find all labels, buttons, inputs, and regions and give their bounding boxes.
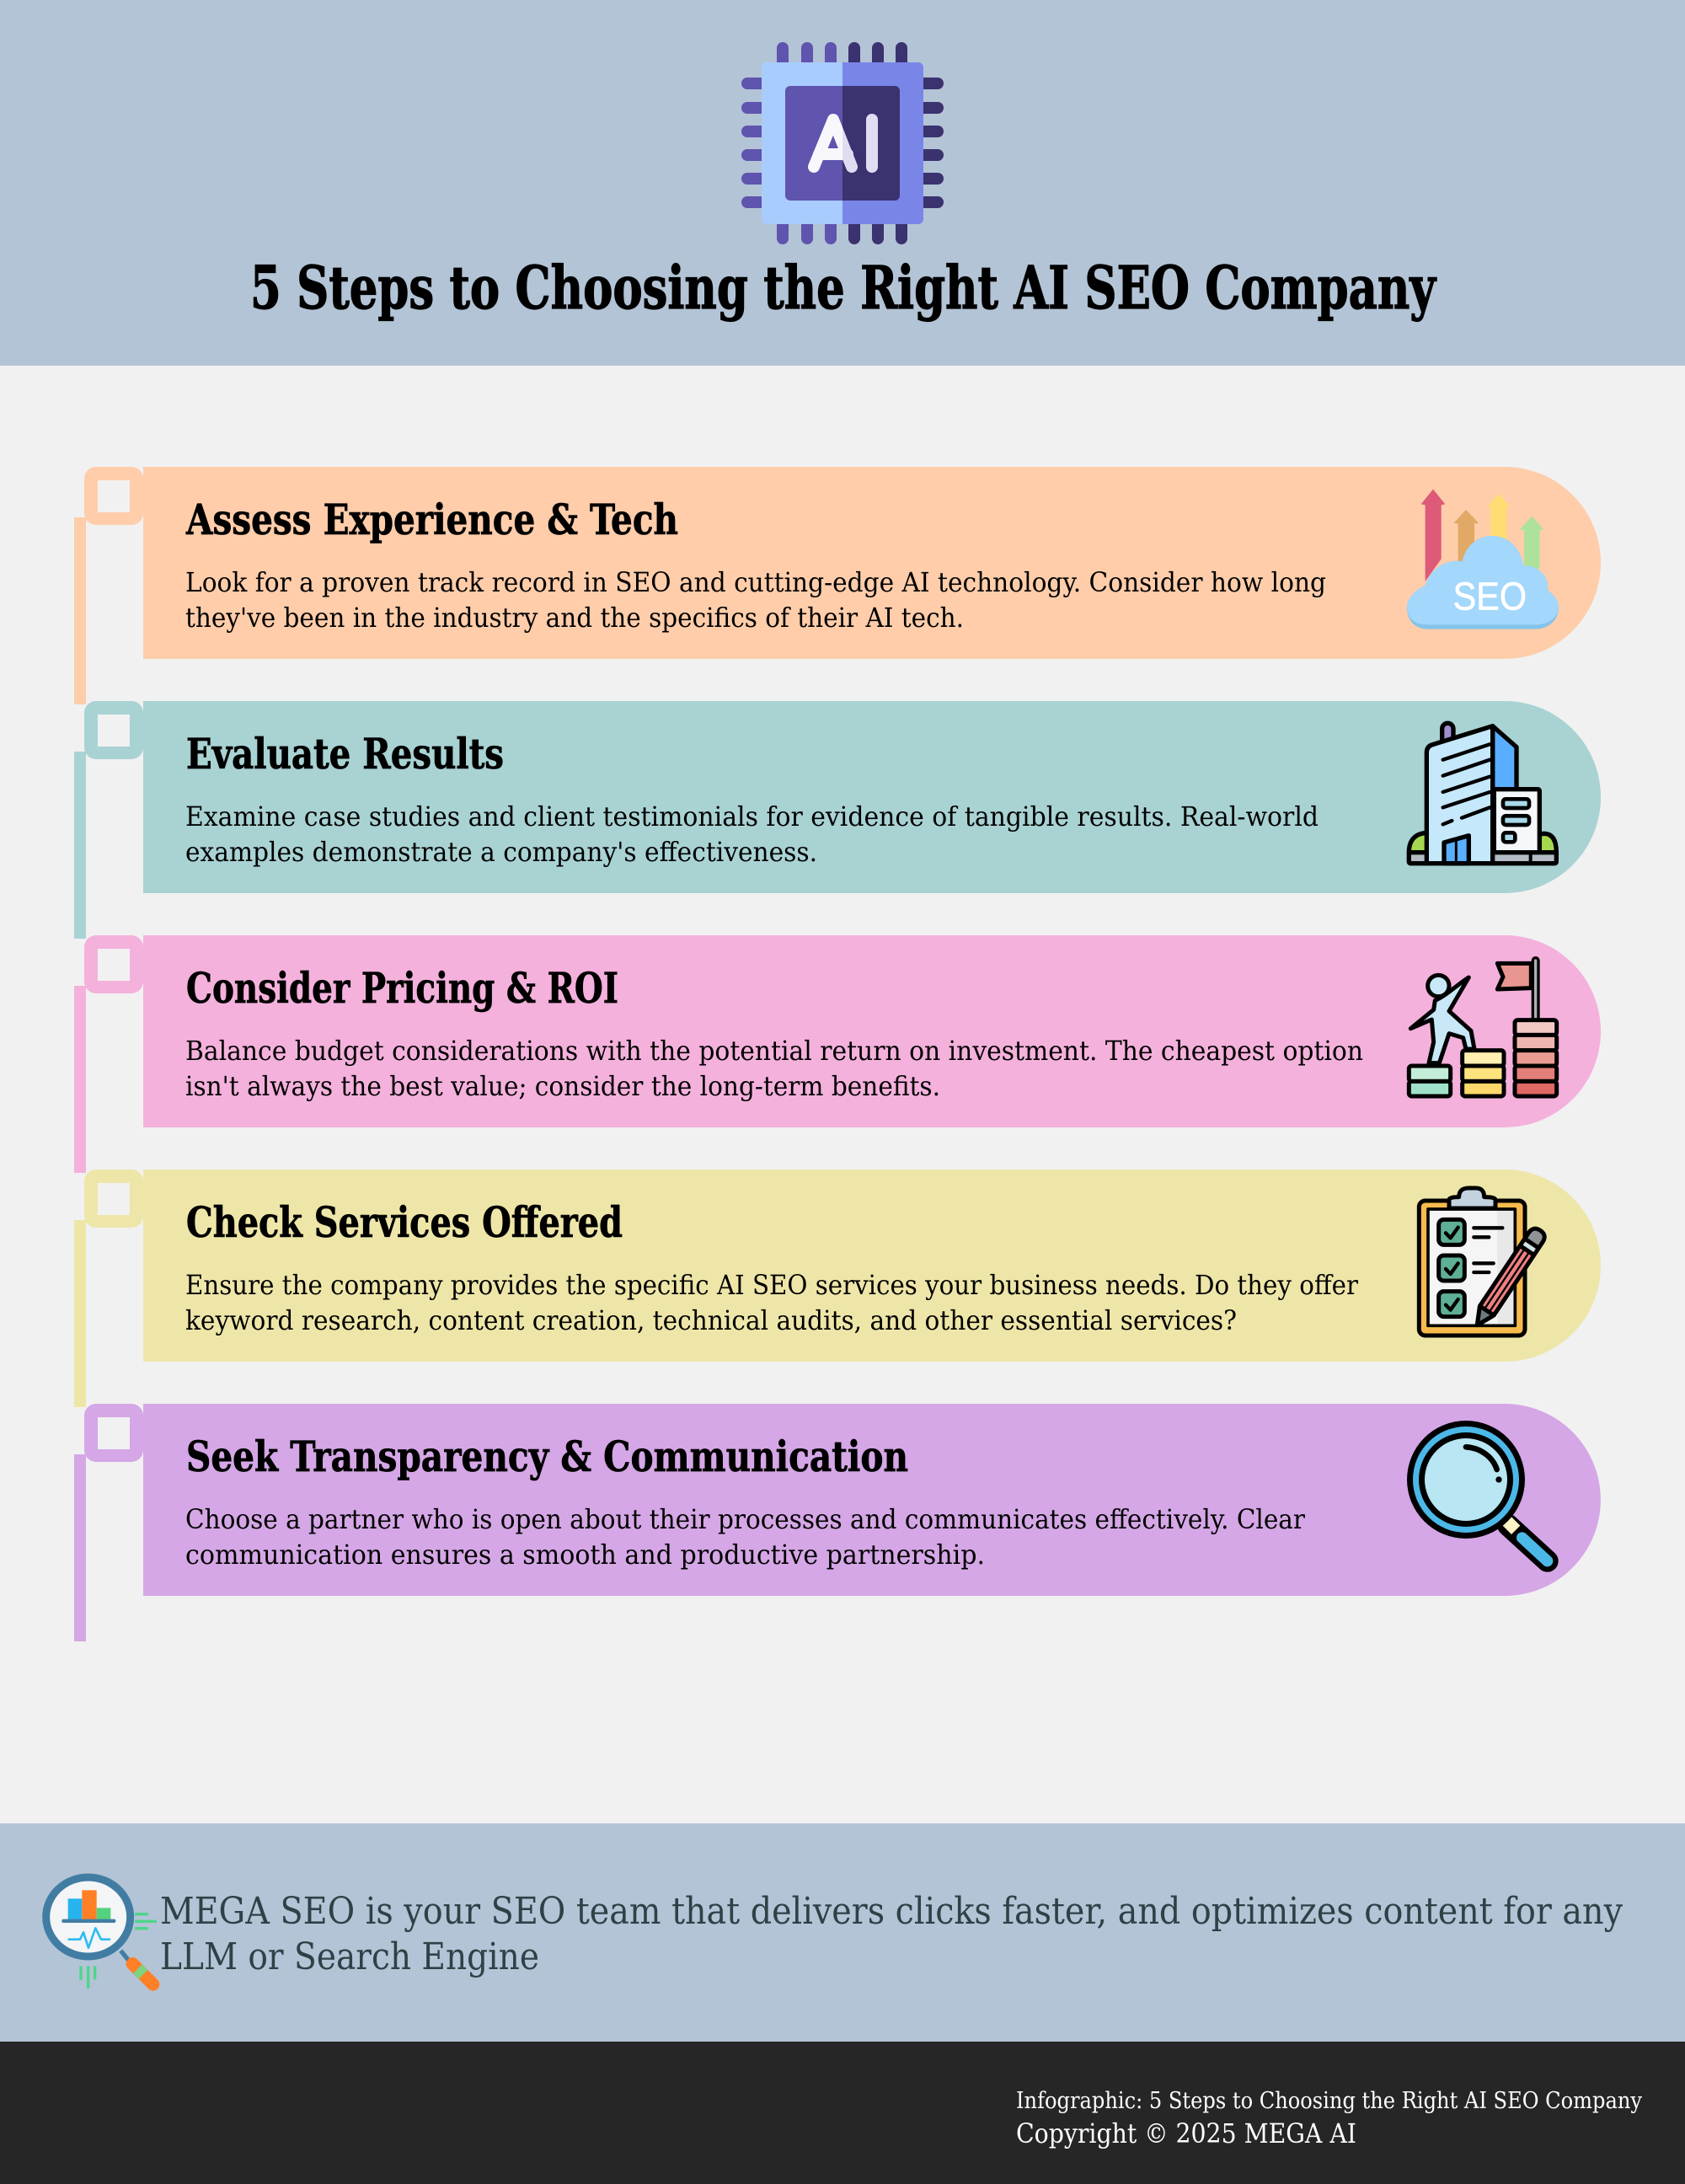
icon: AI chip	[747, 48, 938, 238]
icon: magnifier with chart	[46, 1877, 157, 1989]
title: 5 Steps to Choosing the Right AI SEO Company	[250, 253, 1437, 323]
step 4 description: Ensure the company provides the specific AI SEO services your business needs. Do they offer	[185, 1269, 1358, 1301]
step 3 heading: Consider Pricing & ROI	[186, 963, 618, 1013]
step 1 panel: Assess Experience & Tech	[74, 467, 1601, 704]
step 3 description: isn't always the best value; consider the long-term benefits.	[185, 1070, 940, 1102]
step 5 description: communication ensures a smooth and productive partnership.	[185, 1539, 985, 1571]
step 4 heading: Check Services Offered	[186, 1197, 623, 1247]
copyright line: Copyright © 2025 MEGA AI	[1016, 2117, 1356, 2149]
step 2 heading: Evaluate Results	[186, 729, 504, 779]
promo text: LLM or Search Engine	[160, 1935, 539, 1978]
header panel	[0, 0, 1685, 366]
step 5 panel: Seek Transparency & Communication	[74, 1404, 1601, 1641]
icon: clipboard checklist with pencil	[1419, 1188, 1548, 1336]
step 5 description	[185, 1503, 1305, 1571]
step 1 description: they've been in the industry and the specifics of their AI tech.	[185, 602, 964, 634]
step 1 heading: Assess Experience & Tech	[185, 495, 678, 544]
step 2 panel: Evaluate Results	[74, 701, 1601, 939]
step 4 description	[185, 1269, 1358, 1336]
icon: SEO cloud with arrows: SEO	[1453, 574, 1527, 618]
icon: SEO cloud with arrows	[1407, 490, 1559, 629]
icon: magnifying glass	[1407, 1421, 1548, 1561]
icon: person climbing to flag	[1409, 961, 1557, 1096]
infographic credit: Infographic: 5 Steps to Choosing the Right AI SEO Company	[1016, 2088, 1642, 2114]
step 1 description: Look for a proven track record in SEO and cutting-edge AI technology. Consider how long	[185, 566, 1326, 598]
step 2 description: Examine case studies and client testimonials for evidence of tangible results. Real-world	[185, 800, 1319, 832]
promo text	[160, 1890, 1623, 1978]
copyright footer	[0, 2042, 1685, 2184]
footer promo band	[0, 1823, 1685, 2042]
step 3 panel: Consider Pricing & ROI	[74, 935, 1601, 1173]
step 5 description: Choose a partner who is open about their processes and communicates effectively. Clear	[185, 1503, 1305, 1535]
step 1 description	[185, 566, 1326, 634]
step 4 description: keyword research, content creation, technical audits, and other essential services?	[185, 1304, 1237, 1336]
step 5 heading: Seek Transparency & Communication	[186, 1432, 908, 1481]
step 2 description: examples demonstrate a company's effectiveness.	[185, 836, 817, 868]
step 2 description	[185, 800, 1319, 868]
step 3 description: Balance budget considerations with the potential return on investment. The cheapest option	[185, 1035, 1363, 1067]
promo text: MEGA SEO is your SEO team that delivers clicks faster, and optimizes content for any	[160, 1890, 1623, 1933]
step 3 description	[185, 1035, 1363, 1102]
icon: office building	[1409, 723, 1556, 864]
step 4 panel: Check Services Offered	[74, 1170, 1601, 1407]
